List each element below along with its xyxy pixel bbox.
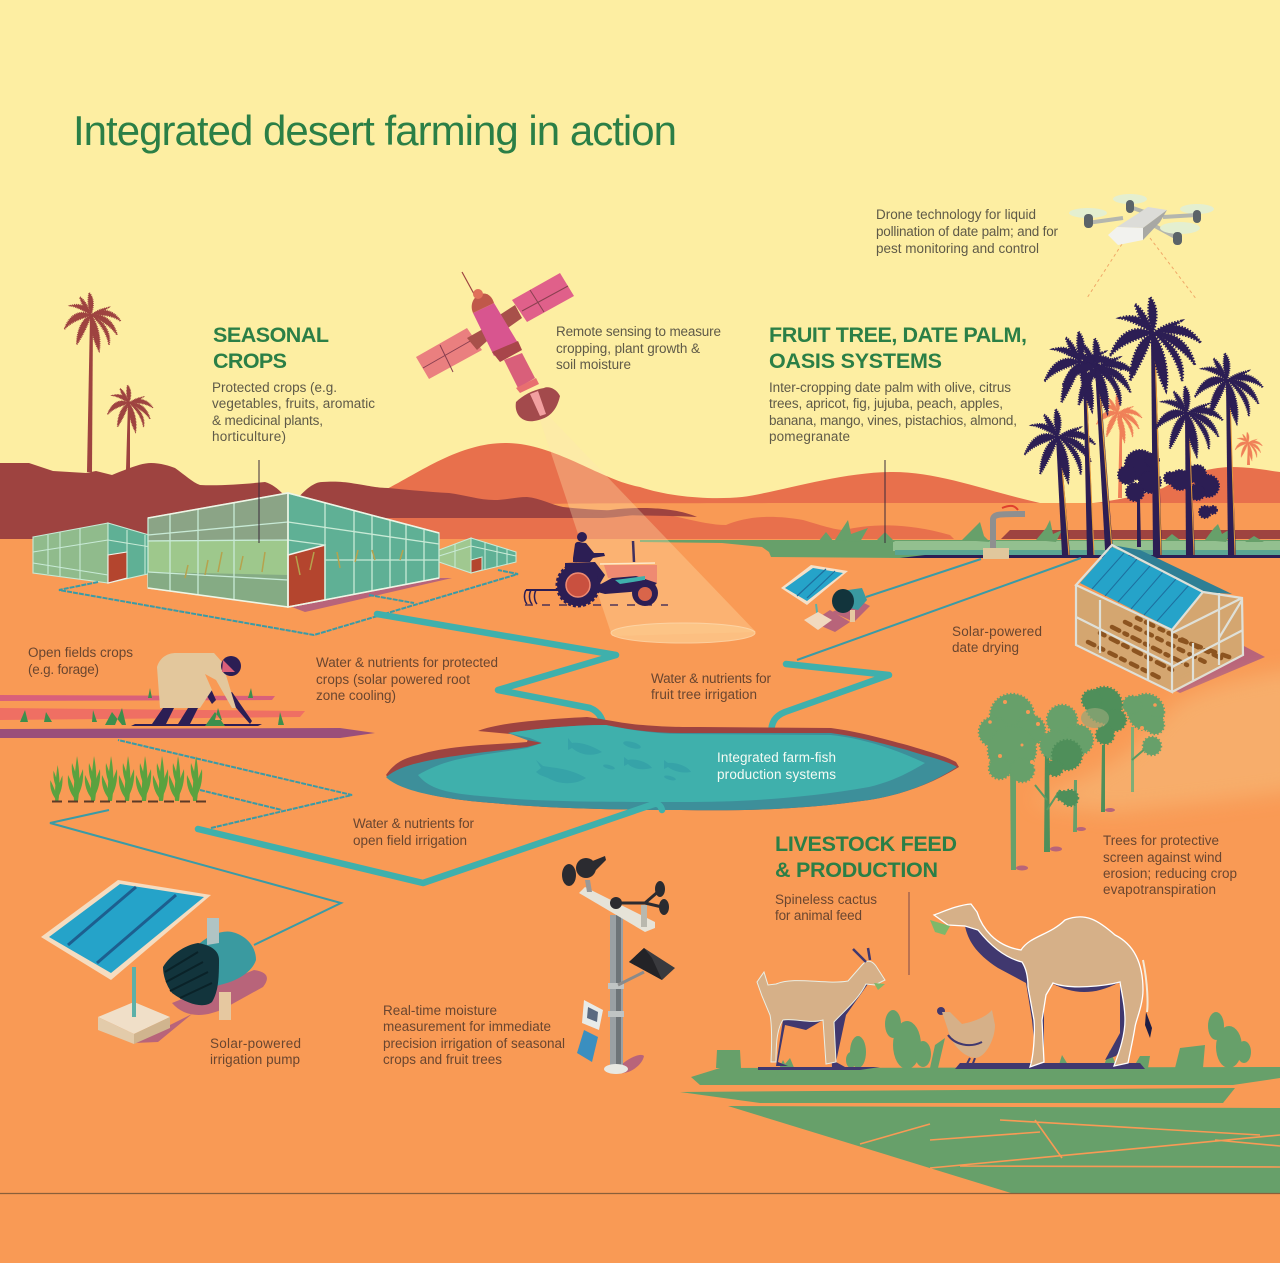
weather station [562,856,675,1074]
greenhouse main [148,493,439,607]
text: protected crops [212,380,375,444]
text: moisture measurement: precision irrigation of seasonal [383,1036,565,1051]
leader line: livestock [908,892,910,975]
text: water protected: crops (solar powered root [316,672,470,687]
near red dunes [340,512,960,545]
satellite [416,272,574,421]
heading: fruit tree [769,323,1027,373]
text: drone technology: pollination of date palm; and for [876,224,1058,239]
text: moisture measurement [383,1003,565,1067]
palms: orange oasis [1096,395,1262,498]
goat [757,948,885,1070]
text: farm-fish: production systems [717,767,836,782]
seedlings [20,688,284,726]
solar date dryer [1076,545,1265,693]
text: spineless cactus [775,892,877,923]
text: moisture measurement: crops and fruit trees [383,1052,502,1067]
maroon hills [0,463,650,539]
text: open field irrigation: open field irrigation [353,833,467,848]
heading: livestock [775,832,957,882]
heading: seasonal crops: SEASONAL [213,323,329,347]
main pipe: fruit trees [771,664,889,735]
fish [536,738,691,783]
chicken [937,1007,995,1066]
text: protected crops: Protected crops (e.g. [212,380,337,395]
oasis green strip [640,520,1280,558]
text: moisture measurement: Real-time moisture [383,1003,497,1018]
heading: fruit tree: FRUIT TREE, DATE PALM, [769,323,1027,347]
text: protective trees: erosion; reducing crop [1103,866,1237,881]
text: inter-cropping: Inter-cropping date palm with olive, citrus [769,380,1011,395]
text: date drying: Solar-powered [952,624,1042,639]
text: remote sensing [556,324,721,372]
main pipe: open field [198,804,662,883]
text: open field irrigation: Water & nutrients for [353,816,474,831]
text: drone technology [876,207,1058,256]
cactus and grass [885,1010,901,1038]
text: open fields [28,645,133,677]
leader line: seasonal crops [258,460,260,543]
heading: livestock: LIVESTOCK FEED [775,832,957,856]
text: protected crops: horticulture) [212,429,286,444]
pump small [832,588,870,622]
text: farm-fish: Integrated farm-fish [717,750,836,765]
text: water fruit tree [651,671,772,702]
text: water fruit tree: fruit tree irrigation [651,687,757,702]
text: date drying: date drying [952,640,1019,655]
text: inter-cropping: banana, mango, vines, pistachios, almond, [769,413,1017,428]
text: water protected [316,655,498,703]
bottom rule [0,1192,1280,1194]
greenhouse left [33,523,187,583]
heading: fruit tree: OASIS SYSTEMS [769,349,942,373]
green field [680,1010,1280,1193]
canopy gaps [988,700,1157,764]
text: inter-cropping: pomegranate [769,429,850,444]
leader line: fruit tree [884,460,886,543]
heading: seasonal crops [213,323,329,373]
palms: dark oasis [1024,297,1263,555]
beam from satellite [539,415,756,643]
seedlings [185,550,403,578]
text: moisture measurement: measurement for immediate [383,1019,551,1034]
text: farm-fish [717,750,836,782]
dark shrub trees [1118,450,1219,547]
heading: seasonal crops: CROPS [213,349,287,373]
text: drone technology: Drone technology for liquid [876,207,1036,222]
far red hills [385,443,1280,560]
corn row [50,756,206,802]
drone [1069,194,1214,300]
main pipe: protected crops [377,614,616,732]
text: water protected: Water & nutrients for protected [316,655,498,670]
small maroon dune [590,508,697,517]
text: water fruit tree: Water & nutrients for [651,671,772,686]
text: spineless cactus: Spineless cactus [775,892,877,907]
tractor [524,532,668,606]
orange sand band [540,503,1280,560]
text: remote sensing: Remote sensing to measure [556,324,721,339]
text: irrigation pump [210,1036,301,1067]
text: date drying [952,624,1042,655]
text: remote sensing: cropping, plant growth & [556,341,700,356]
text: open field irrigation [353,816,474,848]
ground [0,539,1280,1263]
greenhouse right [439,538,516,573]
text: irrigation pump: Solar-powered [210,1036,301,1051]
solar panel large [41,880,211,1044]
windbreak trees [979,687,1164,870]
solar panel small [781,565,850,632]
irrigation pump large [163,918,267,1020]
text: open fields: (e.g. forage) [28,662,99,677]
text: remote sensing: soil moisture [556,357,631,372]
palms: left maroon [64,293,153,472]
text: protective trees [1103,833,1237,897]
text: drone technology: pest monitoring and control [876,241,1039,256]
field strips [0,695,375,738]
text: spineless cactus: for animal feed [775,908,862,923]
greenhouse shadow [292,578,452,612]
pump outlet [983,506,1025,559]
text: protective trees: Trees for protective [1103,833,1219,848]
text: inter-cropping [769,380,1017,444]
text: protected crops: vegetables, fruits, aromatic [212,396,375,411]
tufts [818,520,1264,542]
text: protective trees: evapotranspiration [1103,882,1216,897]
thin irrigation lines [50,558,1081,945]
farmer in open field [0,653,375,738]
text: inter-cropping: trees, apricot, fig, jujuba, peach, apples, [769,396,1003,411]
camel [930,904,1152,1069]
text: protective trees: screen against wind [1103,850,1222,865]
text: water protected: zone cooling) [316,688,396,703]
maroon stripe near oasis [1000,530,1280,540]
title: Integrated desert farming in action [73,107,677,154]
wind dust [1030,668,1280,812]
heading: livestock: & PRODUCTION [775,858,938,882]
text: protected crops: & medicinal plants, [212,413,323,428]
pond [386,717,959,810]
text: open fields: Open fields crops [28,645,133,660]
text: irrigation pump: irrigation pump [210,1052,300,1067]
